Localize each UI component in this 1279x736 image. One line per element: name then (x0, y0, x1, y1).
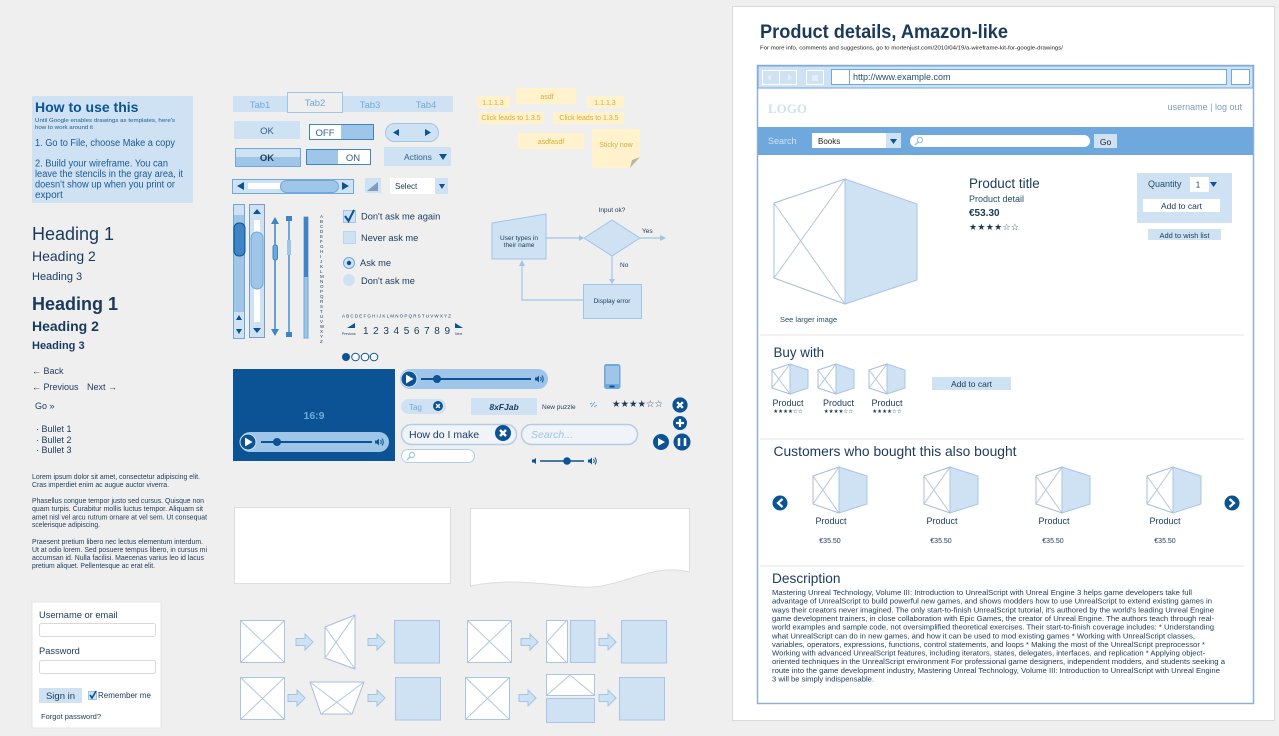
browser toolbar: http://www.example.com (853, 72, 951, 82)
panel: login form: Sign in (46, 691, 75, 702)
section: description: 3 will be simply indispensable. (772, 676, 874, 684)
buttons and toggles: ON (346, 153, 360, 164)
section: description: game development trainers, in close collaboration with Epic Games, the creator of Unreal Engine. The authors teach through real- (772, 616, 1215, 623)
subtitle: For more info, comments and suggestions, go to mortenjust.com/2010/04/19/a-wireframe-kit-for-google-drawings/ (760, 46, 1064, 52)
user links: username | log out (1168, 102, 1242, 112)
section: buy with: ★★★★☆☆ (824, 409, 853, 415)
tag (401, 399, 446, 414)
search field with text (402, 424, 516, 444)
checkboxes: Don't ask me again (361, 212, 440, 222)
instructions text: leave the stencils in the gray area, it (35, 169, 183, 180)
video player (233, 369, 395, 461)
lorem ipsum text: Cras imperdiet enim ac augue auctor viverra. (32, 482, 169, 489)
quantity panel (1137, 173, 1232, 240)
section: description: Description (772, 571, 840, 586)
flowchart (492, 207, 666, 318)
section: description: Mastering Unreal Technology, Volume III: Introduction to UnrealScript with Unreal Engine 3 helps game developers take full (772, 590, 1192, 597)
section: buy with: ★★★★☆☆ (773, 409, 803, 415)
navigation links: Go » (35, 401, 55, 411)
carousel dots (342, 353, 378, 361)
navigation links: Next → (87, 382, 117, 392)
buttons and toggles: OK (260, 153, 274, 164)
section: customers also bought: Customers who bought this also bought (774, 444, 1017, 459)
section: buy with: Buy with (774, 345, 824, 360)
lorem ipsum text: accumsan id. Nulla facilisi. Maecenas varius leo id lacus (32, 555, 204, 562)
panel: product page sheet (732, 6, 1274, 720)
lorem ipsum text: Lorem ipsum dolor sit amet, consectetur adipiscing elit. (32, 474, 200, 481)
sticky note: Sticky now (599, 142, 634, 149)
star rating: ★★★★☆☆ (612, 399, 663, 410)
captcha (471, 398, 597, 415)
torn paper panel (470, 508, 690, 587)
lorem ipsum text (32, 474, 207, 570)
tabs (233, 92, 453, 112)
panel: login form (32, 602, 161, 728)
sticky labels: Click leads to 1.3.5 (559, 115, 619, 122)
icon: previous arrow (772, 496, 788, 510)
product info: €53.30 (969, 208, 1000, 219)
bullets: · Bullet 2 (36, 435, 72, 445)
headings samples: Heading 1 (32, 294, 118, 314)
search field with text: How do I make (409, 429, 479, 441)
section: customers also bought (772, 444, 1240, 545)
search bar (758, 127, 1253, 155)
flowchart: Input ok? (599, 207, 626, 214)
main product image: See larger image (780, 315, 837, 324)
small search field (402, 450, 474, 462)
captcha: 8xFJab (489, 402, 519, 412)
search bar: Books (818, 137, 840, 146)
headings samples: Heading 2 (32, 318, 99, 334)
pager: Previous (342, 332, 356, 336)
instructions text (35, 118, 183, 201)
captcha: New puzzle (542, 404, 576, 411)
search field empty (522, 424, 638, 444)
icon: phone (604, 364, 620, 389)
radio buttons: Don't ask me (361, 276, 415, 286)
instructions text: 2. Build your wireframe. You can (35, 158, 168, 170)
vertical scrollbars and sliders (234, 204, 308, 338)
blank panel (234, 508, 450, 584)
checkboxes: Never ask me (361, 233, 418, 243)
search bar: Go (1100, 137, 1111, 147)
section: buy with: Product (871, 398, 903, 408)
search bar: Search (768, 136, 797, 146)
lorem ipsum text: quam turpis. Curabitur mollis luctus tempor. Aliquam sit (32, 506, 203, 513)
sticky labels: Click leads to 1.3.5 (481, 115, 541, 122)
section: customers also bought: €35.50 (1154, 538, 1176, 545)
sticky labels: 1.1.1.3 (482, 100, 504, 107)
checkboxes (344, 210, 440, 244)
lorem ipsum text: pretium aliquet. Pellentesque ac erat elit. (32, 563, 155, 570)
section: customers also bought: €35.50 (1042, 538, 1064, 545)
section: customers also bought: €35.50 (930, 538, 952, 545)
title: Product details, Amazon-like (760, 22, 1008, 43)
sticky labels (477, 88, 624, 149)
pager: 123456789 (363, 326, 450, 337)
main product image (774, 179, 917, 324)
tabs: Tab2 (305, 98, 325, 109)
section: buy with: Add to cart (951, 379, 993, 389)
instructions text: 1. Go to File, choose Make a copy (35, 138, 175, 149)
flowchart: No (620, 262, 629, 269)
section: description: world examples and sample code, not oversimplified theoretical exercises. Their start-to-finish coverage includes: * Understanding (771, 625, 1214, 632)
panel: login form: Username or email (39, 610, 118, 620)
section: customers also bought: Product (926, 516, 958, 526)
navigation links: ← Previous (32, 382, 79, 392)
browser toolbar (758, 66, 1253, 88)
buttons and toggles: OK (260, 126, 275, 137)
bullets (36, 424, 72, 455)
sticky labels: asdf (540, 94, 554, 101)
navigation links: ← Back (32, 366, 64, 376)
sticky labels: 1.1.1.3 (594, 100, 616, 107)
radio buttons: Ask me (360, 258, 391, 268)
panel: how to use this (32, 96, 193, 203)
pager (342, 314, 463, 337)
instructions text: Until Google enables drawings as templates, here's (35, 118, 175, 124)
panel: login form: Password (39, 646, 80, 656)
headings samples (32, 224, 118, 352)
product info (969, 176, 1040, 233)
horizontal scrollbar and select (232, 178, 448, 194)
instructions text: export (35, 190, 63, 201)
video player: 16:9 (303, 410, 325, 422)
wireframe transformation row 2 (240, 674, 664, 722)
lorem ipsum text: scelerisque adipiscing. (32, 522, 100, 529)
tabs: Tab1 (250, 100, 270, 111)
navigation links (32, 366, 117, 411)
tabs: Tab4 (416, 100, 436, 111)
headings samples: Heading 3 (32, 340, 85, 352)
buttons and toggles: OFF (316, 128, 335, 139)
section: description (771, 571, 1225, 684)
tag: Tag (409, 403, 422, 412)
heading: how to use this: How to use this (35, 99, 139, 115)
section: customers also bought: Product (1149, 516, 1181, 526)
sticky note (592, 129, 640, 168)
bullets: · Bullet 1 (36, 424, 72, 434)
panel: login form: Forgot password? (41, 712, 101, 721)
lorem ipsum text: Praesent pretium libero nec lectus elementum interdum. (32, 539, 203, 546)
product info: ★★★★☆☆ (969, 223, 1019, 233)
logo: LOGO (768, 101, 807, 116)
quantity panel: 1 (1196, 180, 1201, 190)
audio player (400, 369, 548, 389)
section: description: route into the game development industry, Mastering Unreal Technology, Volume III: Introduction to UnrealScript with Unreal Engine (772, 668, 1220, 675)
section: customers also bought: Product (815, 516, 847, 526)
icon: next arrow (1224, 496, 1240, 510)
quantity panel: Add to cart (1161, 201, 1203, 211)
buttons and toggles: Actions (404, 152, 432, 162)
section: description: ways their creators never imagined. The only start-to-finish UnrealScript tutorial, it's authored by the world's leading Unreal Engine (771, 607, 1214, 614)
browser frame (758, 66, 1254, 704)
horizontal scrollbar and select: Select (395, 182, 418, 191)
section: description: variables, operators, expressions, functions, control statements, and loops * Making the most of the UnrealScript preprocessor * (772, 642, 1205, 649)
section: customers also bought: €35.50 (819, 538, 841, 545)
section: buy with: ★★★★☆☆ (872, 409, 902, 415)
section: buy with: Product (772, 398, 804, 408)
headings samples: Heading 1 (32, 224, 114, 244)
instructions text: how to work around it (35, 125, 94, 131)
section: buy with (772, 345, 1011, 415)
radio buttons (343, 258, 415, 286)
section: description: advantage of UnrealScript to build powerful new games, and shows modders how to use UnrealScript to extend existing games in (772, 599, 1212, 606)
section: description: what UnrealScript can do in new games, and how it can be used to mod existing games * Working with UnrealScript classes, (771, 633, 1195, 640)
lorem ipsum text: amet nisl vel arcu rutrum ornare at vel sem. Ut consequat (32, 514, 207, 522)
wireframe transformation row 1 (240, 615, 666, 669)
section: buy with: Product (823, 398, 855, 408)
panel: login form: Remember me (98, 691, 151, 700)
section: description: oriented techniques in the UnrealScript environment For professional game designers, independent modders, and students seeking a (772, 659, 1225, 666)
flowchart: User types in (500, 235, 538, 242)
product info: Product detail (969, 194, 1024, 204)
section: customers also bought: Product (1038, 516, 1070, 526)
buttons and toggles (234, 121, 451, 166)
pager: Next (455, 332, 462, 336)
flowchart: Yes (642, 228, 653, 235)
instructions text: doesn't show up when you print or (35, 180, 176, 190)
headings samples: Heading 3 (32, 271, 82, 283)
icons: control buttons (653, 397, 690, 450)
flowchart: their name (504, 242, 535, 249)
tabs: Tab3 (360, 100, 380, 111)
headings samples: Heading 2 (32, 248, 96, 264)
quantity panel: Add to wish list (1159, 231, 1210, 240)
lorem ipsum text: Phasellus congue tempor justo sed cursus. Quisque non (32, 498, 204, 505)
vertical alphabet: ABCDEFGHIJKLMNOPQRSTUVWXYZ (320, 214, 325, 344)
bullets: · Bullet 3 (36, 445, 72, 455)
volume slider (532, 457, 596, 465)
section: description: Working with advanced UnrealScript features, including iterators, states, delegates, interfaces, and replication * Applying object- (772, 651, 1206, 658)
pager: ABCDEFGHIJKLMNOPQRSTUVWXYZ (342, 314, 451, 318)
search field empty: Search... (531, 429, 573, 441)
lorem ipsum text: Ut at odio lorem. Sed posuere tempus libero, in cursus mi (32, 547, 207, 554)
quantity panel: Quantity (1148, 179, 1182, 189)
flowchart: Display error (594, 298, 631, 305)
product info: Product title (969, 176, 1040, 191)
sticky labels: asdfasdf (538, 139, 564, 146)
